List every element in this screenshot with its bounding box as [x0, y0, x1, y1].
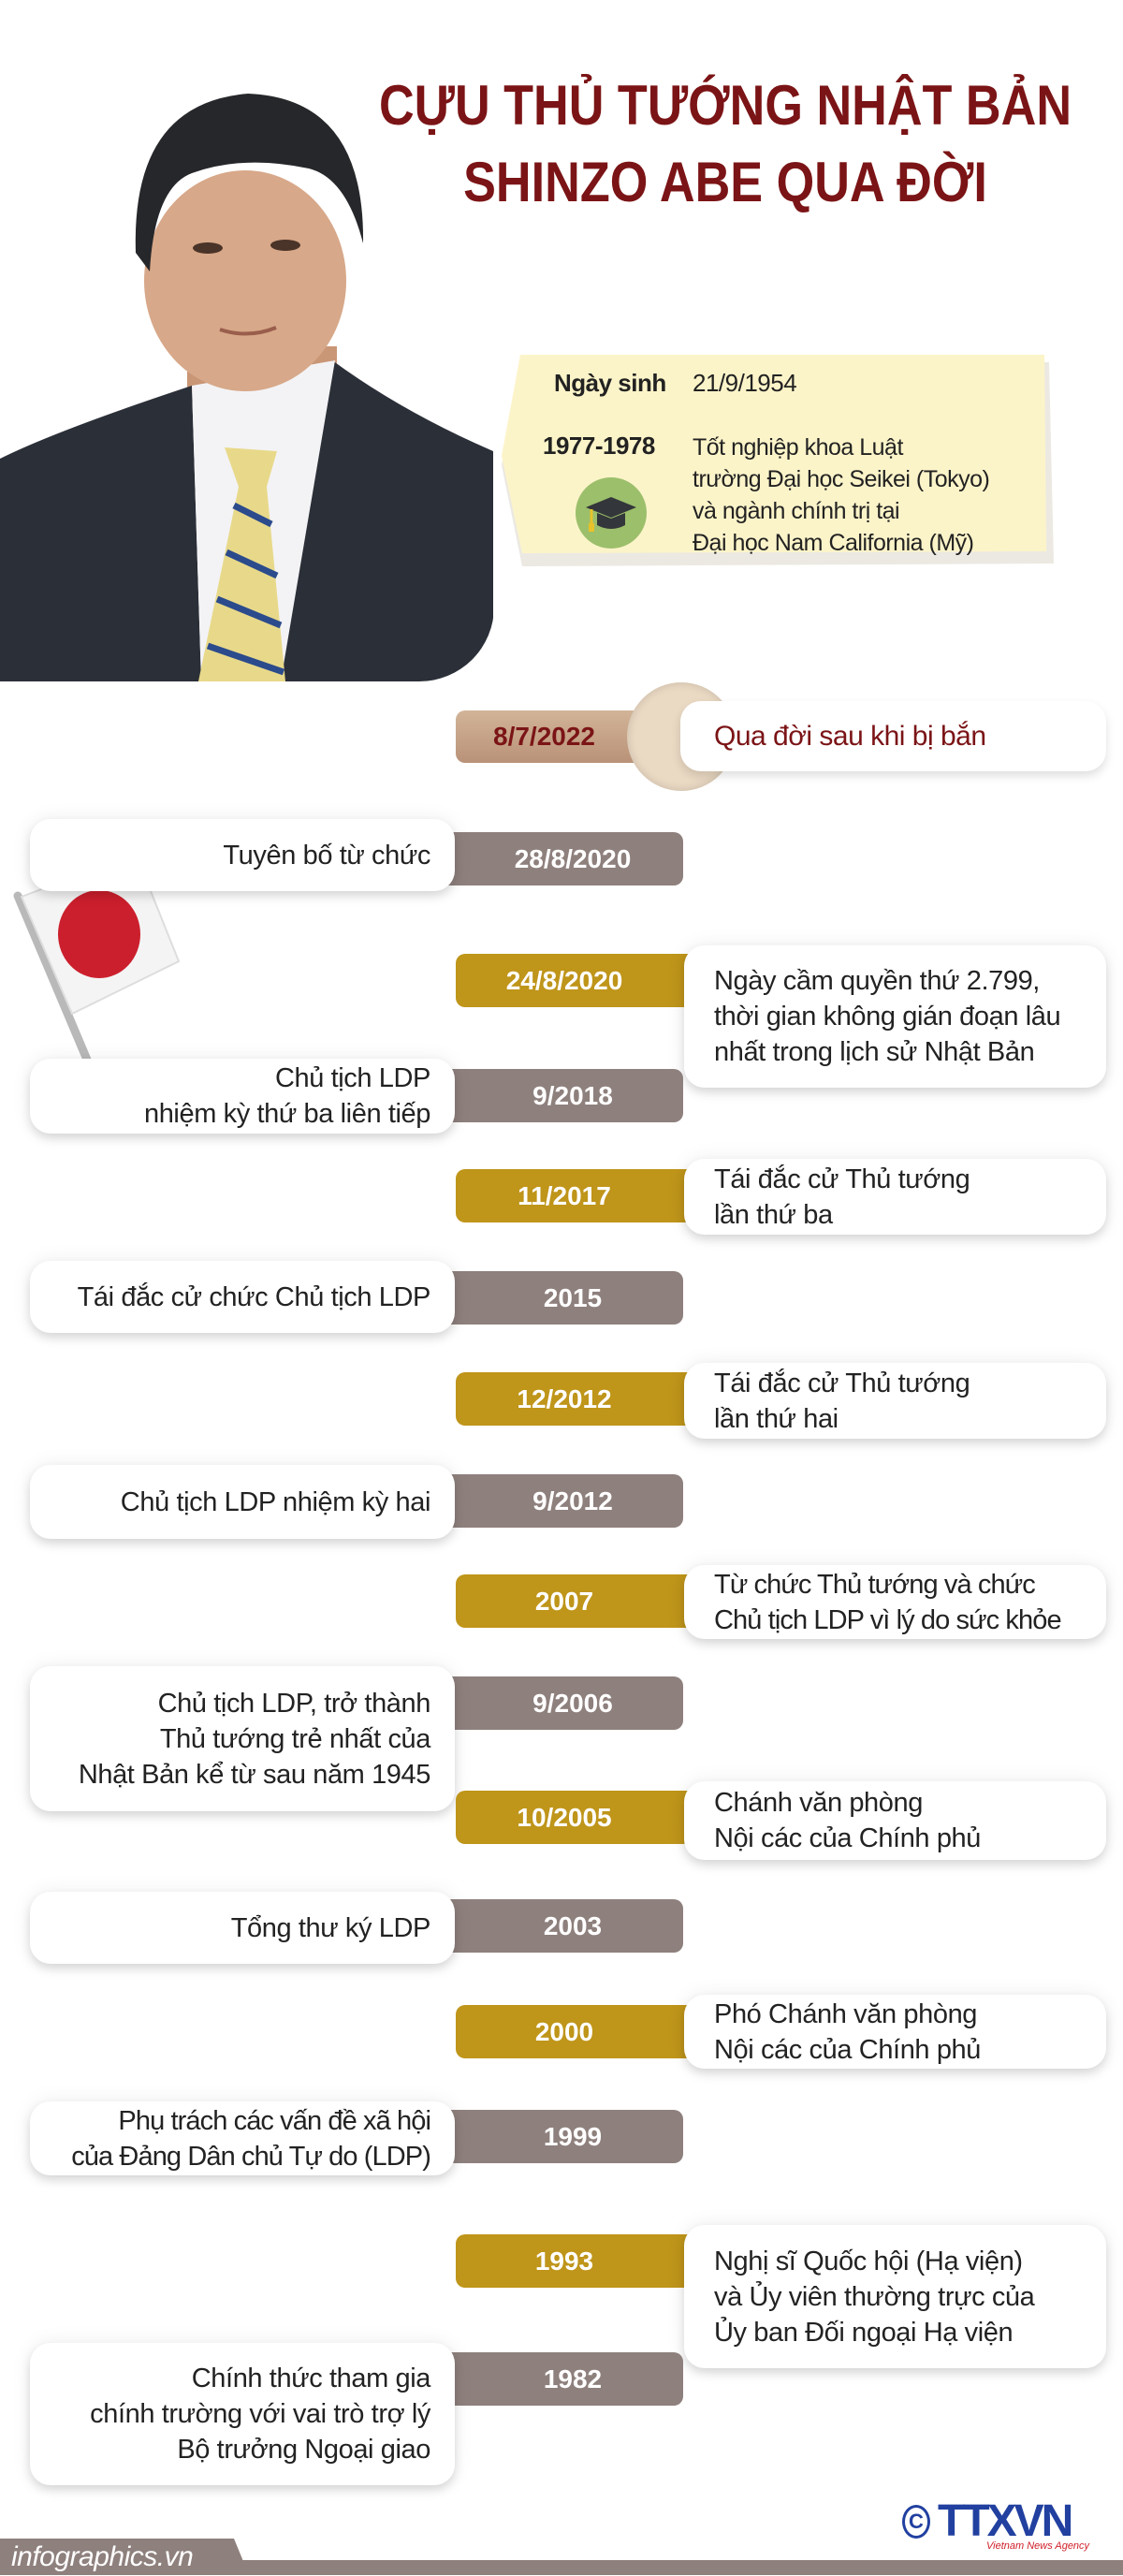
text: Nội các của Chính phủ: [714, 1823, 981, 1853]
text: Ngày cầm quyền thứ 2.799,: [714, 966, 1040, 996]
education row: 1977-1978: [543, 432, 655, 460]
event: 8/7/2022 death: 8/7/2022: [493, 722, 595, 751]
text: Chủ tịch LDP vì lý do sức khỏe: [714, 1604, 1061, 1634]
birth date row: [554, 369, 796, 397]
info box: birth and education: trường Đại học Seikei (Tokyo): [693, 466, 989, 492]
icon: Japanese flag: [13, 889, 180, 1059]
text: Nhật Bản kể từ sau năm 1945: [79, 1760, 430, 1790]
text: Nghị sĩ Quốc hội (Hạ viện): [714, 2247, 1023, 2276]
event: 2015: 2015: [544, 1282, 602, 1312]
text: Chủ tịch LDP, trở thành: [158, 1689, 430, 1719]
logo: TTXVN: [902, 2496, 1089, 2552]
title: SHINZO ABE QUA ĐỜI: [463, 151, 987, 213]
footer: infographics.vn tab: infographics.vn: [11, 2541, 193, 2572]
info box: birth and education: [502, 355, 1054, 566]
text: Tổng thư ký LDP: [231, 1913, 430, 1943]
text: thời gian không gián đoạn lâu: [714, 1002, 1060, 1032]
event: 10/2005: 10/2005: [517, 1803, 612, 1831]
text: Chủ tịch LDP nhiệm kỳ hai: [121, 1486, 430, 1516]
event: 24/8/2020: [456, 954, 699, 1007]
event: 10/2005: [456, 1791, 699, 1844]
event: 2003: 2003: [544, 1911, 602, 1939]
text: chính trường với vai trò trợ lý: [90, 2399, 430, 2429]
text: nhất trong lịch sử Nhật Bản: [714, 1037, 1034, 1067]
event: 1993: [456, 2234, 699, 2288]
event: 2000: [456, 2005, 699, 2058]
event: 1993: 1993: [535, 2247, 593, 2275]
text: Tái đắc cử Thủ tướng: [714, 1368, 970, 1398]
title: CỰU THỦ TƯỚNG NHẬT BẢN: [379, 74, 1072, 137]
event: 2003: [440, 1899, 683, 1953]
event: 2015: [440, 1271, 683, 1325]
event: 9/2006: [440, 1676, 683, 1730]
text: Phụ trách các vấn đề xã hội: [118, 2106, 430, 2136]
text: Chánh văn phòng: [714, 1788, 923, 1818]
icon: graduation cap: [576, 477, 647, 549]
birth date row: Ngày sinh: [554, 369, 666, 397]
text: Nội các của Chính phủ: [714, 2035, 981, 2065]
text: Chính thức tham gia: [192, 2364, 430, 2393]
event: 9/2012: 9/2012: [532, 1486, 613, 1515]
event: 9/2018: [440, 1069, 683, 1122]
event: 2000: 2000: [535, 2016, 593, 2046]
event: 28/8/2020: [440, 832, 683, 886]
photo: Shinzo Abe portrait: [0, 94, 493, 681]
text: lần thứ hai: [714, 1404, 839, 1434]
logo: TTXVN: TTXVN: [938, 2496, 1071, 2546]
text: Từ chức Thủ tướng và chức: [714, 1569, 1035, 1599]
event: 12/2012: 12/2012: [517, 1383, 612, 1413]
title: [379, 74, 1072, 213]
text: của Đảng Dân chủ Tự do (LDP): [71, 2142, 430, 2172]
text: Chủ tịch LDP: [275, 1063, 430, 1093]
event: 12/2012: [456, 1372, 699, 1426]
text: Ủy ban Đối ngoại Hạ viện: [714, 2318, 1013, 2348]
info box: birth and education: và ngành chính trị tại: [693, 498, 899, 524]
text: Tái đắc cử chức Chủ tịch LDP: [78, 1282, 430, 1312]
text: Tuyên bố từ chức: [223, 841, 430, 871]
text: Phó Chánh văn phòng: [714, 1999, 977, 2029]
text: nhiệm kỳ thứ ba liên tiếp: [144, 1099, 430, 1129]
text: Tái đắc cử Thủ tướng: [714, 1164, 970, 1194]
event: 1982: 1982: [544, 2364, 602, 2393]
event: 8/7/2022 death: Qua đời sau khi bị bắn: [714, 721, 986, 751]
event: 1999: 1999: [544, 2121, 602, 2151]
logo: TTXVN: Vietnam News Agency: [986, 2540, 1089, 2552]
footer: infographics.vn tab: [0, 2539, 243, 2571]
info box: birth and education: Đại học Nam California (Mỹ): [693, 530, 973, 556]
event: 2007: [456, 1574, 699, 1628]
text: và Ủy viên thường trực của: [714, 2282, 1034, 2312]
event: 9/2018: 9/2018: [532, 1080, 613, 1110]
event: 1982: [440, 2352, 683, 2406]
event: 1999: [440, 2110, 683, 2163]
info box: birth and education: Tốt nghiệp khoa Luật: [693, 434, 903, 461]
event: 28/8/2020: 28/8/2020: [515, 844, 631, 872]
logo: TTXVN: C: [909, 2510, 924, 2533]
event: 9/2006: 9/2006: [532, 1689, 613, 1717]
info box: birth and education: 21/9/1954: [693, 369, 796, 397]
footer bar: [0, 2560, 1123, 2575]
text: Thủ tướng trẻ nhất của: [160, 1724, 430, 1754]
text: lần thứ ba: [714, 1200, 833, 1230]
event: 9/2012: [440, 1474, 683, 1528]
event: 24/8/2020: 24/8/2020: [506, 966, 622, 994]
event: 11/2017: 11/2017: [518, 1181, 611, 1209]
event: 2007: 2007: [535, 1586, 593, 1616]
text: Bộ trưởng Ngoại giao: [177, 2435, 430, 2465]
event: 8/7/2022 death: [456, 682, 1109, 791]
event: 11/2017: [456, 1169, 699, 1222]
